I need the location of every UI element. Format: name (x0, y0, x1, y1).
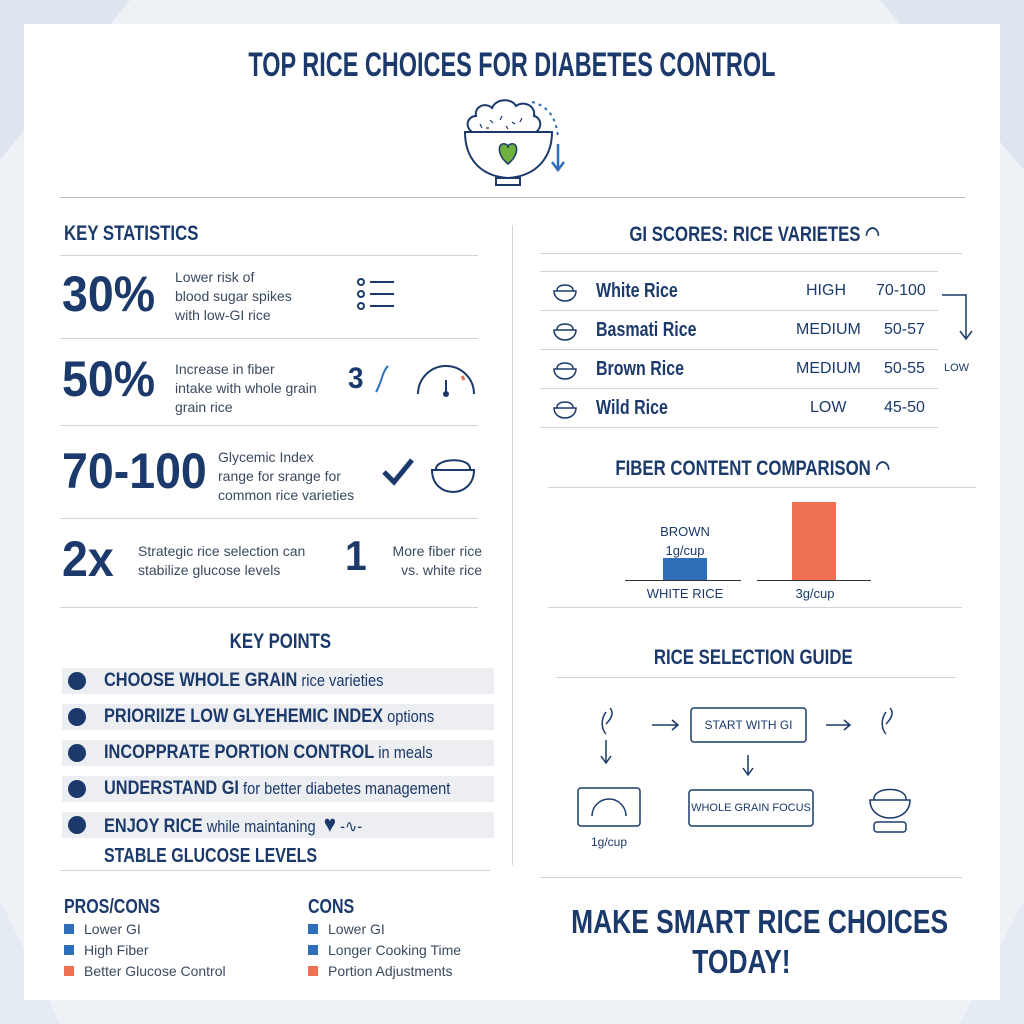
arrow: low (942, 294, 972, 340)
row: basmati: MEDIUM (796, 321, 861, 338)
stat 2x: vs. white rice (401, 562, 482, 578)
heading: guide: RICE SELECTION GUIDE (654, 646, 852, 669)
row: wild (540, 389, 938, 428)
stat 50%: grain rice (175, 399, 233, 415)
bar: brown (663, 558, 707, 580)
row: brown: 50-55 (884, 360, 925, 377)
stat 50% (62, 351, 475, 415)
panel: fiber chart: 3g/cup (795, 586, 835, 601)
pros list (64, 896, 226, 979)
panel: fiber chart: WHITE RICE (647, 586, 723, 601)
key point 5 (62, 812, 494, 838)
stat 70-100 (62, 443, 475, 503)
cons list: Longer Cooking Time (328, 942, 461, 958)
stat 70-100: 70-100 (62, 443, 207, 499)
stat 30%: Lower risk of (175, 269, 254, 285)
heading: key points: KEY POINTS (229, 630, 331, 653)
heading: fiber: FIBER CONTENT COMPARISON ◠ (616, 457, 890, 480)
panel: rice selection guide: 1g/cup (591, 835, 627, 849)
stat 70-100: Glycemic Index (218, 449, 314, 465)
panel: fiber chart (548, 457, 976, 608)
stat 70-100: range for srange for (218, 468, 341, 484)
panel: GI scores (540, 223, 972, 428)
key point 2: PRIORIIZE LOW GLYEHEMIC INDEX options (104, 706, 434, 727)
title: TOP RICE CHOICES FOR DIABETES CONTROL (248, 46, 776, 84)
row: basmati (540, 311, 938, 350)
stat 2x: 2x (62, 531, 114, 587)
cons list: Lower GI (328, 921, 385, 937)
stat 2x (62, 531, 482, 587)
cons list (308, 896, 461, 979)
stat 50%: 3 (348, 362, 364, 395)
icon: check and bowl (382, 458, 475, 493)
panel: key statistics (60, 222, 482, 608)
stat 50%: Increase in fiber (175, 361, 275, 377)
panel: rice selection guide: WHOLE GRAIN FOCUS (691, 802, 811, 814)
heading: GI scores: GI SCORES: RICE VARIETES ◠ (630, 223, 880, 246)
call to action: TODAY! (692, 943, 790, 980)
row: white rice: HIGH (806, 282, 846, 299)
key point 1 (62, 668, 494, 694)
pros list: PROS/CONS (64, 896, 160, 918)
heading: key statistics: KEY STATISTICS (64, 222, 198, 245)
panel: fiber chart: BROWN (660, 524, 710, 539)
stat 30%: 30% (62, 266, 155, 322)
row: wild: LOW (810, 399, 846, 416)
panel: rice selection guide: START WITH GI (704, 718, 792, 732)
pros list: Lower GI (84, 921, 141, 937)
cons list: Portion Adjustments (328, 963, 453, 979)
stat 2x: stabilize glucose levels (138, 562, 280, 578)
key point 4: UNDERSTAND GI for better diabetes management (104, 778, 450, 799)
call to action: MAKE SMART RICE CHOICES (571, 903, 948, 940)
key point 3 (62, 740, 494, 766)
row: basmati: Basmati Rice (596, 319, 696, 341)
stat 70-100: common rice varieties (218, 487, 354, 503)
stat 30%: blood sugar spikes (175, 288, 292, 304)
pros list: Better Glucose Control (84, 963, 226, 979)
bar: white (792, 502, 836, 580)
stat 30%: with low-GI rice (175, 307, 271, 323)
row: white rice: White Rice (596, 280, 678, 302)
stat 30% (62, 266, 394, 323)
icon: list (357, 278, 394, 310)
row: brown: Brown Rice (596, 358, 684, 380)
key point 3: INCOPPRATE PORTION CONTROL in meals (104, 742, 433, 763)
panel: fiber chart: 1g/cup (665, 543, 705, 558)
flowchart (577, 707, 911, 833)
row: wild: 45-50 (884, 399, 925, 416)
key point 2 (62, 704, 494, 730)
key point 4 (62, 776, 494, 802)
pros list: High Fiber (84, 942, 149, 958)
row: white rice (540, 272, 938, 311)
row: brown: MEDIUM (796, 360, 861, 377)
icon: rice bowl with heart (464, 99, 565, 186)
row: brown (540, 350, 938, 389)
row: wild: Wild Rice (596, 397, 668, 419)
panel: rice selection guide (556, 646, 956, 849)
stat 50%: intake with whole grain (175, 380, 317, 396)
icon: gauge (375, 365, 475, 397)
stat 2x: More fiber rice (393, 543, 482, 559)
key point 1: CHOOSE WHOLE GRAIN rice varieties (104, 670, 383, 691)
row: white rice: 70-100 (876, 282, 926, 299)
text: STABLE GLUCOSE LEVELS (104, 845, 317, 867)
call to action (571, 903, 948, 980)
stat 50%: 50% (62, 351, 155, 407)
key point 5: ENJOY RICE while maintaning ♥ -∿- (104, 811, 362, 838)
stat 2x: 1 (345, 532, 367, 579)
row: basmati: 50-57 (884, 321, 925, 338)
stat 2x: Strategic rice selection can (138, 543, 305, 559)
panel: GI scores: LOW (944, 362, 969, 374)
cons list: CONS (308, 896, 354, 918)
